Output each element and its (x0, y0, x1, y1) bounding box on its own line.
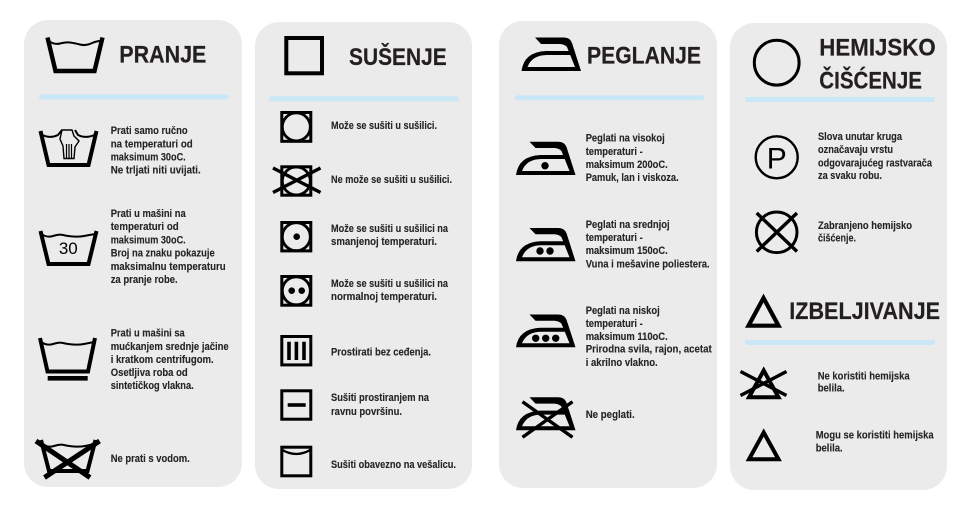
icon: dry clean circle (754, 40, 799, 85)
text: circle P: označavaju vrstu (818, 144, 893, 156)
text: gentle wash: Osetljiva roba od (111, 367, 188, 379)
icon: wash tub (48, 38, 102, 71)
text: iron low: maksimum 110oC. (586, 331, 668, 343)
icon: circle P: P (767, 142, 787, 176)
text: gentle wash: Prati u mašini sa (111, 328, 185, 340)
text: iron high: Peglati na visokoj (586, 133, 665, 145)
text: no bleach (818, 370, 910, 395)
text: hand wash: maksimum 30oC. (111, 152, 186, 164)
icon: drying square (286, 38, 322, 73)
text: iron medium: Peglati na srednjoj (586, 219, 670, 231)
text: dry flat: Sušiti prostiranjem na (331, 392, 430, 404)
text: bleach allowed: Mogu se koristiti hemijska (816, 429, 934, 441)
icon: no bleach (740, 370, 786, 397)
text: iron low: i akrilno vlakno. (586, 357, 658, 369)
text: gentle wash: i kratkom centrifugom. (111, 354, 214, 366)
heading: peglanje: PEGLANJE (587, 43, 701, 70)
icon: tumble dry normal (282, 276, 311, 305)
heading: pranje: PRANJE (119, 41, 206, 68)
text: iron low: temperaturi - (586, 318, 643, 330)
icon: gentle wash (40, 338, 95, 381)
divider: hemijsko (745, 97, 935, 102)
text: no dry clean: čišćenje. (818, 233, 856, 245)
text: iron medium (586, 219, 710, 271)
icon: drip dry (282, 336, 311, 365)
panel background: susenje (255, 22, 472, 489)
panel background: pranje (24, 20, 242, 487)
panel: pranje (24, 20, 242, 487)
heading: susenje: SUŠENJE (349, 43, 447, 71)
icon: tumble dry (282, 112, 311, 141)
text: dry flat: ravnu površinu. (331, 406, 402, 418)
text: do not wash: Ne prati s vodom. (111, 453, 190, 465)
text: circle P: za svaku robu. (818, 170, 882, 182)
text: wash 30: Broj na znaku pokazuje (111, 248, 215, 260)
icon: iron high (516, 142, 576, 175)
icon: wash 30: 30 (59, 239, 78, 258)
text: wash 30: za pranje robe. (111, 274, 178, 286)
icon: dry flat (282, 391, 311, 419)
icon: no dry clean (756, 212, 797, 253)
panel: susenje (255, 22, 472, 489)
icon: do not iron (516, 397, 576, 437)
panel: peglanje (499, 21, 717, 488)
panel background: peglanje (499, 21, 717, 488)
text: circle P (818, 131, 933, 182)
text: tumble dry normal: Može se sušiti u sušilici na (331, 278, 449, 290)
icon: iron low (516, 314, 576, 347)
icon: iron medium (516, 228, 576, 261)
icon: wash 30 (40, 231, 96, 264)
text: wash 30: Prati u mašini na (111, 208, 186, 220)
text: do not tumble dry: Ne može se sušiti u sušilici. (331, 174, 452, 186)
text: iron low: Peglati na niskoj (586, 305, 660, 317)
text: dry flat (331, 392, 430, 418)
panel background: hemijsko (730, 23, 947, 490)
text: no dry clean (818, 220, 912, 245)
text: hand wash: na temperaturi od (111, 138, 193, 150)
text: wash 30: temperaturi od (111, 221, 179, 233)
text: hand wash (111, 125, 201, 176)
text: no bleach: belila. (818, 383, 845, 395)
text: line dry: Sušiti obavezno na vešalicu. (331, 459, 456, 471)
text: gentle wash: sintetičkog vlakna. (111, 380, 194, 392)
text: iron high (586, 133, 679, 184)
icon: line dry (282, 447, 311, 476)
text: no dry clean: Zabranjeno hemijsko (818, 220, 912, 232)
text: wash 30: maksimum 30oC. (111, 234, 186, 246)
icon: hand wash (40, 130, 96, 165)
text: gentle wash (111, 328, 229, 392)
text: bleach allowed: belila. (816, 443, 843, 455)
divider: izbeljivanje (745, 340, 935, 345)
icon: tumble dry low (282, 222, 311, 251)
divider: pranje (39, 94, 229, 100)
panel: hemijsko ciscenje i izbeljivanje (730, 23, 947, 490)
text: iron low (586, 305, 712, 369)
icon: bleach allowed (749, 432, 778, 459)
text: iron high: maksimum 200oC. (586, 159, 668, 171)
text: no bleach: Ne koristiti hemijska (818, 370, 910, 382)
text: hand wash: Ne trljati niti uvijati. (111, 164, 201, 176)
text: circle P: Slova unutar kruga (818, 131, 903, 143)
text: iron low: Prirodna svila, rajon, acetat (586, 344, 712, 356)
text: tumble dry low: smanjenoj temperaturi. (331, 236, 437, 248)
text: hand wash: Prati samo ručno (111, 125, 188, 137)
text: do not iron: Ne peglati. (586, 409, 635, 421)
text: wash 30: maksimalnu temperaturu (111, 261, 226, 273)
icon: circle P (756, 136, 798, 178)
heading: izbeljivanje: IZBELJIVANJE (789, 298, 940, 325)
text: iron medium: maksimum 150oC. (586, 245, 668, 257)
text: wash 30 (111, 208, 226, 286)
icon: do not wash (36, 440, 100, 478)
text: iron high: Pamuk, lan i viskoza. (586, 172, 679, 184)
text: tumble dry normal (331, 278, 449, 303)
text: tumble dry low (331, 223, 449, 248)
heading: hemijsko ciscenje: ČIŠĆENJE (819, 66, 922, 94)
text: bleach allowed (816, 429, 934, 455)
icon: bleach triangle (748, 298, 778, 326)
divider: susenje (269, 96, 459, 101)
text: tumble dry: Može se sušiti u sušilici. (331, 120, 437, 132)
text: iron medium: Vuna i mešavine poliestera. (586, 259, 710, 271)
text: iron high: temperaturi - (586, 146, 643, 158)
icon: iron (522, 38, 581, 71)
heading: hemijsko ciscenje (819, 35, 936, 94)
heading: hemijsko ciscenje: HEMIJSKO (819, 35, 936, 62)
text: tumble dry low: Može se sušiti u sušilici na (331, 223, 449, 235)
text: gentle wash: mućkanjem srednje jačine (111, 341, 229, 353)
text: iron medium: temperaturi - (586, 232, 643, 244)
text: circle P: odgovarajućeg rastvarača (818, 158, 933, 170)
text: drip dry: Prostirati bez ceđenja. (331, 347, 431, 359)
icon: do not tumble dry (273, 167, 320, 195)
divider: peglanje (515, 95, 704, 100)
text: tumble dry normal: normalnoj temperaturi. (331, 291, 437, 303)
